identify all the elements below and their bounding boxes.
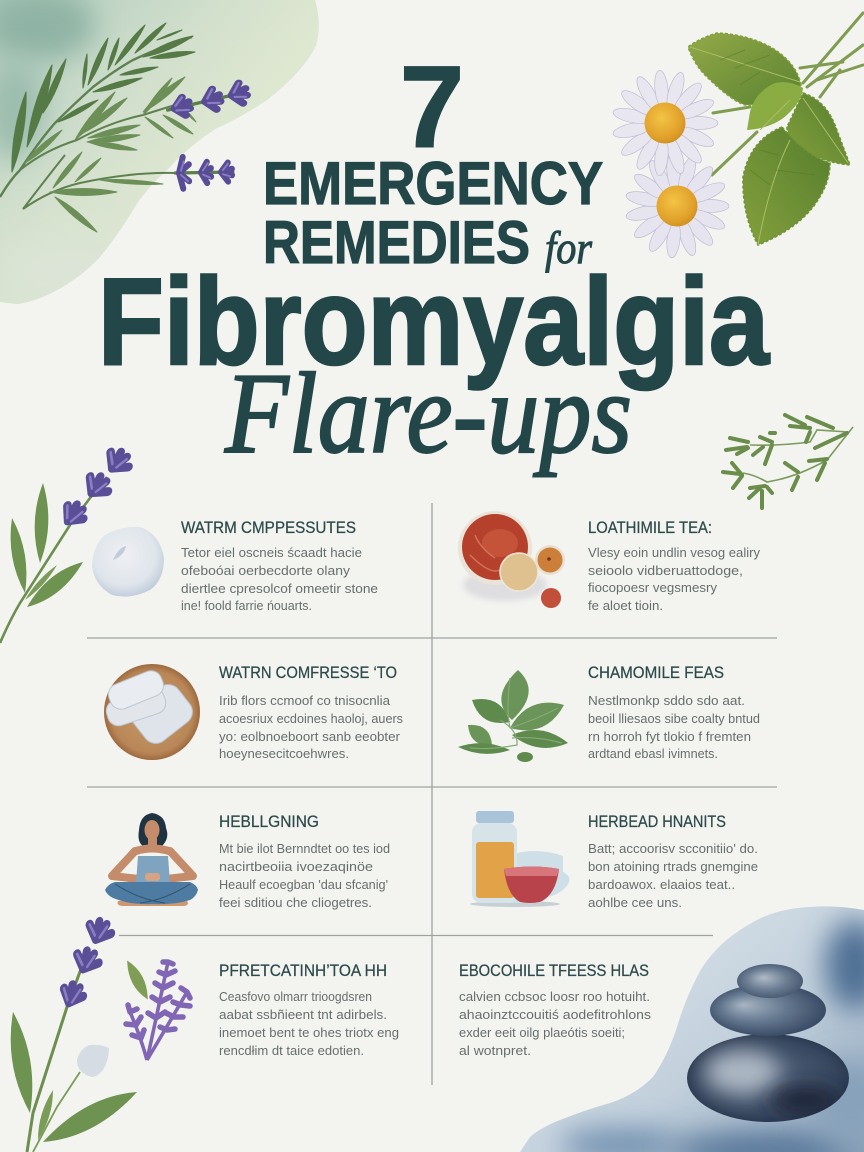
body text — [459, 990, 651, 1058]
body text: Tetor eiel oscneis ścaadt hacie — [181, 546, 362, 560]
body text — [588, 694, 760, 761]
body text: nacirtbeoiia ivoezaqinöe — [219, 860, 373, 874]
stems — [712, 13, 863, 175]
icon: white compress — [92, 527, 164, 597]
body text: ofeboóai oerbecdorte olany — [181, 564, 351, 578]
body text: Batt; accoorisv scconitiio' do. — [588, 842, 758, 856]
rosemary and lavender sprig, top left — [0, 23, 249, 232]
REMEDIES: REMEDIES — [263, 209, 530, 276]
body text: hoeynesecitcoehwres. — [219, 747, 349, 761]
mint leaf right — [787, 93, 850, 165]
body text: diertlee cpresolcof omeetir stone — [181, 582, 378, 596]
Flare-ups: Flare-ups — [224, 350, 632, 478]
herb sprig, right of title — [723, 415, 853, 508]
body text: seioolo vidberuattodoge, — [588, 564, 743, 578]
icon: purple lavender plant with leaf — [126, 962, 190, 1060]
body text: fe aloet tioin. — [588, 599, 663, 613]
stone medium — [710, 984, 826, 1036]
lavender stem, left middle — [0, 447, 133, 643]
body text — [588, 546, 761, 613]
heading: PFRETCATINH’TOA HH — [219, 961, 387, 980]
body text: Mt bie ilot Bernndtet oo tes iod — [219, 842, 390, 856]
mint leaf bottom — [743, 127, 830, 245]
heading: HEBLLGNING — [219, 812, 319, 831]
daisy upper — [612, 70, 718, 176]
lavender flower B — [175, 156, 233, 189]
body text: Irib flors ccmoof co tnisocnlia — [219, 694, 390, 708]
panel: remedy 5 — [105, 812, 390, 910]
blue watercolor blob with stacked stones — [515, 900, 864, 1152]
for: for — [545, 222, 593, 273]
body text — [181, 546, 378, 613]
green watercolor blob — [0, 0, 330, 310]
icon: person meditating — [105, 813, 198, 906]
body text: ardtand ebasl ivimnets. — [588, 747, 718, 761]
panel: remedy 2 — [103, 663, 403, 761]
body text: Heaulf ecoegban 'dau sfcanig' — [219, 878, 388, 892]
body text: exder eeit oilg plaeótis soeiti; — [459, 1026, 625, 1040]
body text — [219, 990, 399, 1058]
body text: bardoawox. elaaios teat.. — [588, 878, 735, 892]
icon: jar and cup of herbal tea — [470, 811, 570, 907]
heading: LOATHIMILE TEA: — [588, 518, 712, 537]
dividers — [87, 503, 777, 1085]
body text: aohlbe cee uns. — [588, 896, 682, 910]
panel: remedy 6 — [470, 811, 758, 910]
mint leaf middle — [747, 82, 803, 130]
body text: Ceasfovo olmarr trioogdsren — [219, 990, 372, 1004]
body text — [588, 842, 758, 910]
stone small — [737, 964, 803, 998]
panel: remedy 7 — [126, 961, 399, 1060]
body text — [219, 694, 403, 761]
heading: HERBEAD HNANITS — [588, 812, 726, 831]
body text: Vlesy eoin undlin vesog ealiry — [588, 546, 761, 560]
body text: ahaoinztccouitiś aodefitrohlons — [459, 1008, 651, 1022]
daisy lower — [625, 154, 729, 258]
body text: rencdłim dt taice edotien. — [219, 1044, 364, 1058]
Fibromyalgia: Fibromyalgia — [98, 254, 770, 391]
number 7: 7 — [400, 42, 464, 172]
panel: remedy 3 — [458, 511, 761, 613]
icon: green herb leaves — [458, 670, 568, 762]
mint leaf top — [688, 33, 801, 105]
body text: beoil lliesaos sibe coalty bntud — [588, 712, 760, 726]
body text — [219, 842, 390, 910]
body text: bon atoining rtrads gnemgine — [588, 860, 758, 874]
body text: ine! foold farrie ńouarts. — [181, 599, 312, 613]
body text: Nestlmonkp sddo sdo aat. — [588, 694, 745, 708]
body text: fiocopoesr vegsmesry — [588, 581, 718, 595]
panel: remedy 1 — [92, 518, 378, 613]
body text: aabat ssbñieent tnt adirbels. — [219, 1008, 387, 1022]
chamomile flowers and mint leaves, top right — [612, 13, 863, 258]
body text: yo: eolbnoeboort sanb eeobter — [219, 730, 400, 744]
heading: WATRN COMFRESSE ‘TO — [219, 663, 397, 682]
body text: al wotnpret. — [459, 1044, 531, 1058]
body text: inemoet bent te ohes triotx eng — [219, 1026, 399, 1040]
EMERGENCY: EMERGENCY — [263, 150, 603, 217]
body text: acoesriux ecdoines haoloj, auers — [219, 712, 403, 726]
body text: calvien ccbsoc loosr roo hotuiht. — [459, 990, 650, 1004]
lavender flower A — [166, 82, 249, 120]
panel: remedy 4 — [458, 663, 760, 762]
heading: WATRM CMPPESSUTES — [181, 518, 356, 537]
body text: feei sditiou che cliogetres. — [219, 896, 372, 910]
icon: compress stones on wooden plate — [103, 664, 200, 760]
lavender stem and bud, bottom left — [11, 919, 137, 1152]
heading: EBOCOHILE TFEESS HLAS — [459, 961, 649, 980]
body text: rn horroh fyt tlokio f fremten — [588, 730, 751, 744]
heading: CHAMOMILE FEAS — [588, 663, 724, 682]
stone large — [687, 1034, 849, 1122]
panel: remedy 8 — [459, 961, 651, 1058]
title — [98, 42, 770, 478]
icon: bowl of red tea with spices — [458, 511, 565, 608]
